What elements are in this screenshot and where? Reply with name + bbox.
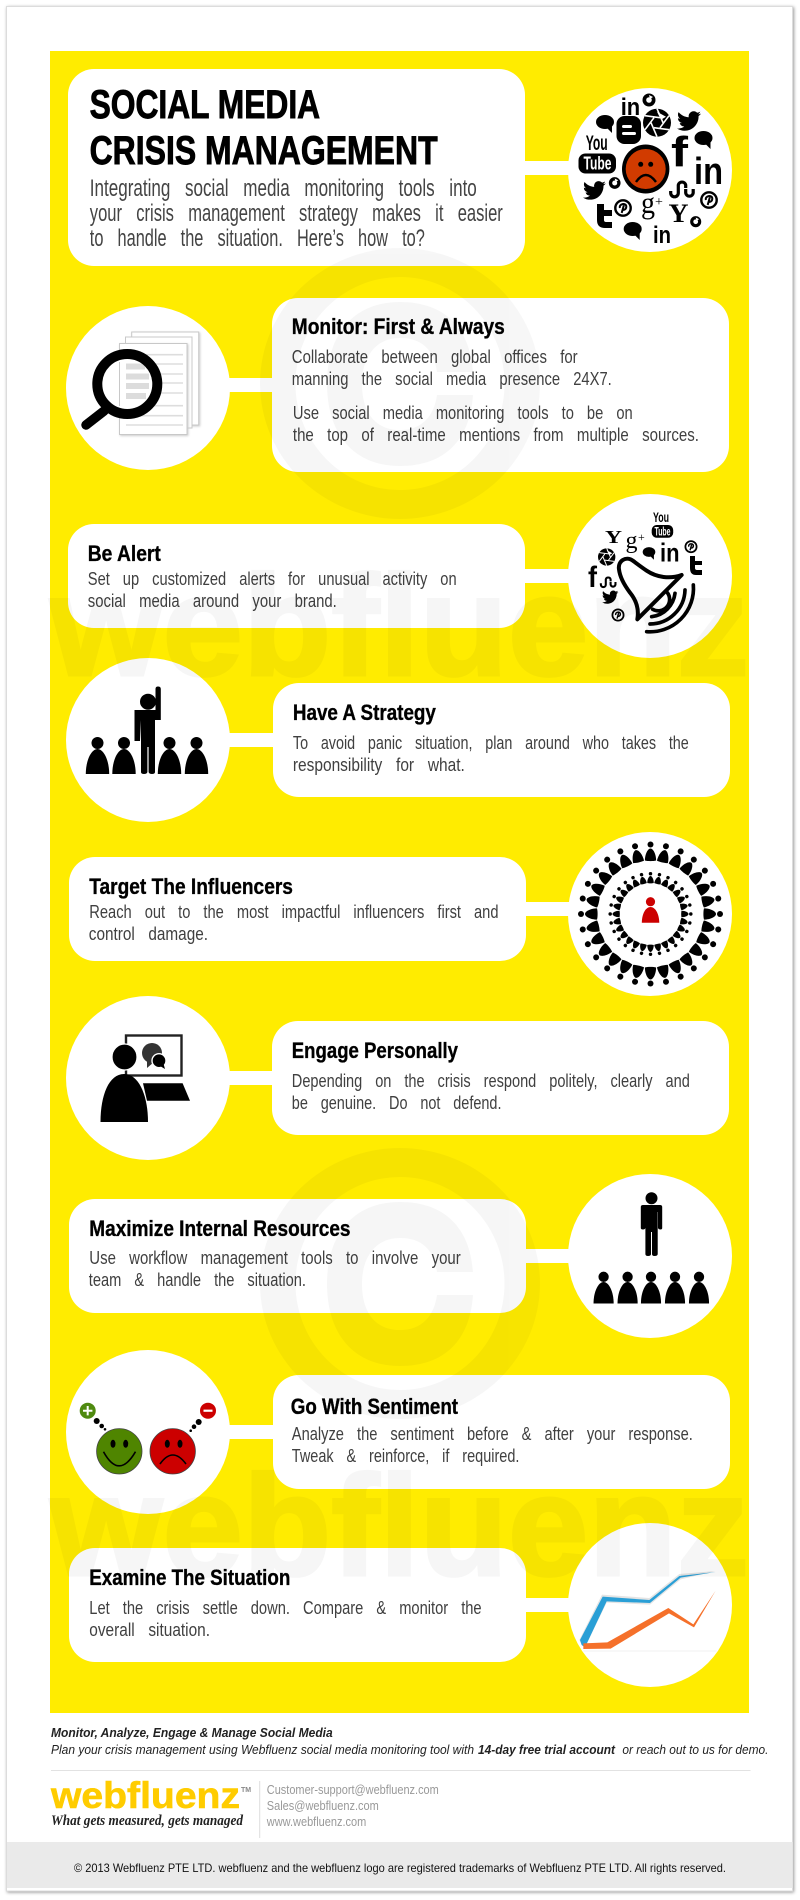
- panel: examine the situation: [69, 1523, 732, 1687]
- panel: engage personally: [66, 996, 729, 1160]
- body text: Use social media monitoring tools to be on: [293, 403, 633, 423]
- body text: Use workflow management tools to involve your: [89, 1248, 461, 1268]
- panel: maximize internal resources: [69, 1174, 732, 1338]
- body text: the top of real-time mentions from multiple sources.: [293, 425, 699, 445]
- body text: [89, 1248, 461, 1290]
- webfluenz logo: What gets measured, gets managed: [51, 1813, 244, 1829]
- icon: alert bell with social icons: You: [653, 509, 669, 525]
- body text: Depending on the crisis respond politely, clearly and: [292, 1071, 690, 1091]
- icon: alert bell with social icons: Y: [605, 527, 622, 547]
- footer call to action: [51, 1725, 768, 1757]
- body text: [293, 733, 689, 775]
- panel: be alert: [68, 494, 732, 658]
- icon: social media cluster with sad face: +: [655, 195, 663, 210]
- copyright bar: © 2013 Webfluenz PTE LTD. webfluenz and the webfluenz logo are registered trademarks of Webfluenz PTE LTD. All rights reserved.: [74, 1861, 726, 1875]
- icon: alert bell with social icons: g: [626, 528, 638, 554]
- icon: leader above five team members: [594, 1192, 709, 1304]
- heading: Be Alert: [88, 541, 161, 566]
- icon: alert bell with social icons: f: [588, 561, 598, 594]
- heading: Monitor: First & Always: [292, 314, 505, 339]
- contact details: www.webfluenz.com: [266, 1815, 366, 1829]
- heading: Have A Strategy: [293, 700, 437, 725]
- panel: strategy: [66, 658, 730, 822]
- body text: responsibility for what.: [293, 755, 465, 775]
- icon: blue and orange line chart: [579, 1571, 717, 1651]
- panel: go with sentiment: [66, 1350, 730, 1514]
- body text: To avoid panic situation, plan around who takes the: [293, 733, 689, 753]
- heading: Examine The Situation: [89, 1565, 290, 1590]
- body text: team & handle the situation.: [89, 1270, 306, 1290]
- contact details: Sales@webfluenz.com: [267, 1799, 379, 1813]
- panel: target the influencers: [69, 832, 732, 996]
- footer call to action: Plan your crisis management using Webfluenz social media monitoring tool with: [51, 1742, 474, 1757]
- contact details: [266, 1783, 439, 1829]
- yellow panel: [50, 51, 749, 1713]
- icon: person at a screen with chat bubbles: [100, 1036, 190, 1122]
- icon: social media cluster with sad face: [578, 94, 723, 249]
- body text: [292, 347, 699, 445]
- icon: alert bell with social icons: Tube: [654, 524, 671, 538]
- panel: monitor: [66, 298, 729, 472]
- webfluenz logo: webfluenz: [50, 1775, 240, 1816]
- intro text: to handle the situation. Here’s how to?: [90, 225, 425, 252]
- icon: social media cluster with sad face: Y: [668, 199, 689, 228]
- heading: Go With Sentiment: [291, 1394, 459, 1419]
- copyright bar: [7, 1842, 792, 1888]
- icon: social media cluster with sad face: g: [641, 185, 655, 220]
- watermark: copyright symbols and webfluenz wordmarks: [49, 248, 749, 1606]
- body text: Reach out to the most impactful influencers first and: [89, 902, 499, 922]
- body text: [292, 1071, 690, 1113]
- webfluenz logo: [50, 1775, 251, 1829]
- body text: [89, 902, 499, 944]
- heading: Engage Personally: [292, 1038, 459, 1063]
- panel: title: [68, 69, 732, 266]
- body text: [292, 1424, 693, 1466]
- body text: [88, 569, 457, 611]
- icon: leader with raised arm and team: [86, 686, 208, 774]
- icon: happy and sad faces with plus and minus: [80, 1403, 216, 1474]
- body text: Let the crisis settle down. Compare & monitor the: [89, 1598, 482, 1618]
- body text: Tweak & reinforce, if required.: [292, 1446, 519, 1466]
- intro text: your crisis management strategy makes it easier: [90, 200, 503, 227]
- icon: alert bell with social icons: in: [660, 538, 680, 568]
- icon: alert bell with social icons: +: [638, 530, 645, 544]
- body text: be genuine. Do not defend.: [292, 1093, 502, 1113]
- icon: social media cluster with sad face: in: [653, 222, 671, 249]
- icon: social media cluster with sad face: f: [671, 129, 689, 177]
- body text: Analyze the sentiment before & after your response.: [292, 1424, 693, 1444]
- icon: social media cluster with sad face: Tube: [584, 154, 612, 174]
- title: SOCIAL MEDIA: [90, 83, 320, 127]
- body text: manning the social media presence 24X7.: [292, 369, 612, 389]
- body text: social media around your brand.: [88, 591, 337, 611]
- contact details: Customer-support@webfluenz.com: [267, 1783, 439, 1797]
- body text: overall situation.: [89, 1620, 210, 1640]
- watermark: copyright symbols and webfluenz wordmarks: webfluenz: [49, 547, 749, 706]
- title: CRISIS MANAGEMENT: [90, 129, 438, 173]
- icon: social media cluster with sad face: in: [694, 151, 723, 193]
- title: [90, 83, 438, 173]
- body text: control damage.: [89, 924, 208, 944]
- icon: concentric rings of people around a red figure: [578, 842, 723, 986]
- webfluenz logo: TM: [241, 1787, 251, 1794]
- body text: Collaborate between global offices for: [292, 347, 578, 367]
- body text: [89, 1598, 482, 1640]
- watermark: copyright symbols and webfluenz wordmarks: webfluenz: [49, 1447, 749, 1606]
- icon: alert bell with social icons: [588, 509, 702, 632]
- footer call to action: or reach out to us for demo.: [622, 1742, 768, 1757]
- icon: documents under magnifier: [86, 332, 199, 434]
- footer call to action: 14-day free trial account: [478, 1742, 616, 1757]
- intro text: Integrating social media monitoring tools into: [90, 175, 477, 202]
- intro text: [90, 175, 503, 252]
- heading: Maximize Internal Resources: [89, 1216, 351, 1241]
- icon: social media cluster with sad face: in: [621, 94, 640, 121]
- footer call to action: Monitor, Analyze, Engage & Manage Social Media: [51, 1725, 333, 1740]
- body text: Set up customized alerts for unusual activity on: [88, 569, 457, 589]
- heading: Target The Influencers: [89, 874, 293, 899]
- icon: social media cluster with sad face: You: [586, 132, 608, 155]
